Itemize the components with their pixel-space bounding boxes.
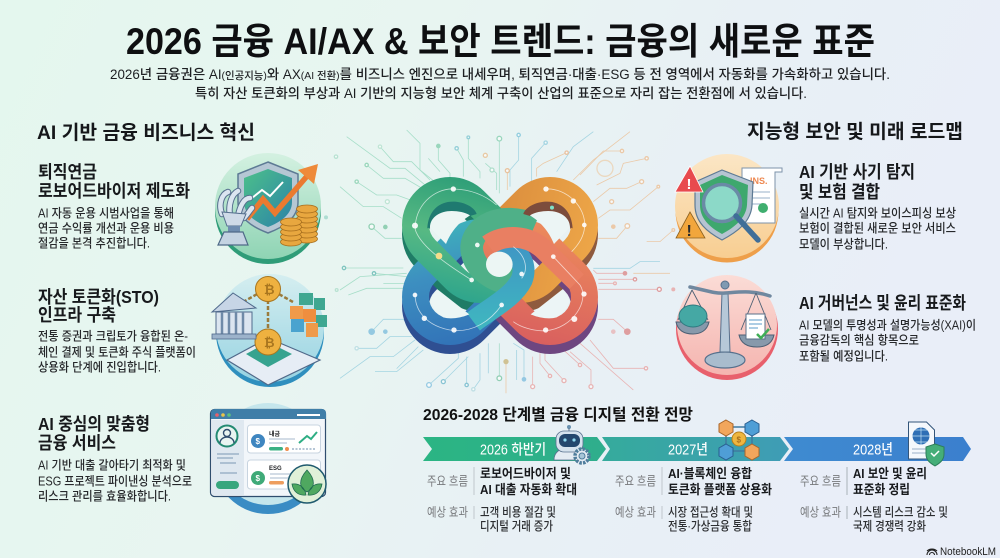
icon: finance app dashboard with leaf badge: 내금 (269, 430, 281, 438)
icon: bank, tokens and blockchain platform: ₿ (264, 335, 275, 350)
column 2027: 예상 효과 (615, 506, 656, 520)
heading: AI 중심의 맞춤형 (38, 414, 150, 434)
text block: AI 자동 운용 시범사업을 통해 (38, 206, 174, 220)
text block: 포함될 예정입니다. (799, 348, 888, 364)
text block: 상용화 단계에 진입합니다. (38, 360, 161, 374)
panel: fraud detection (675, 154, 956, 262)
heading (38, 287, 159, 325)
icon: shield, magnifier, warnings and insurance document (675, 154, 782, 262)
text block: 금융감독의 핵심 항목으로 (799, 332, 919, 348)
panel: digital transformation timeline (423, 406, 971, 534)
icon: global document and shield (908, 422, 944, 466)
text block (38, 328, 196, 374)
icon: shield, magnifier, warnings and insurance document: ! (686, 223, 692, 240)
arrow: 2027 (602, 437, 789, 461)
blue link (401, 218, 529, 346)
text block: 체인 결제 및 토큰화 주식 플랫폼이 (38, 346, 196, 360)
heading: 및 보험 결합 (799, 182, 880, 202)
heading: 퇴직연금 (38, 162, 97, 182)
text block: 보험이 결합된 새로운 보안 서비스 (799, 220, 956, 236)
icon: bank, tokens and blockchain platform (212, 274, 327, 387)
icon: bank, tokens and blockchain platform: ₿ (264, 282, 275, 297)
icon: blockchain cubes and coin (719, 420, 759, 460)
icon: robot with gear (554, 425, 589, 463)
heading: 자산 토큰화(STO) (38, 287, 159, 307)
column 2028: 시스템 리스크 감소 및 (853, 506, 948, 520)
heading: 로보어드바이저 제도화 (38, 181, 190, 201)
heading (799, 162, 915, 202)
icon: shield, magnifier, warnings and insurance document: ! (686, 176, 692, 193)
heading: 인프라 구축 (38, 305, 116, 325)
column 2026: 고객 비용 절감 및 (480, 506, 556, 520)
text block: 절감을 본격 추진합니다. (38, 236, 150, 250)
column 2027: 전통·가상금융 통합 (668, 518, 752, 534)
column 2026: 예상 효과 (427, 506, 468, 520)
icon: finance app dashboard with leaf badge: $ (256, 474, 260, 483)
column 2028: 표준화 정립 (853, 482, 910, 497)
heading (38, 162, 190, 201)
column 2027 (615, 466, 772, 534)
arrow: 2026 second half: 2026 하반기 (480, 442, 546, 458)
column 2027: 토큰화 플랫폼 상용화 (668, 482, 772, 497)
arrow: 2028: 2028년 (853, 442, 893, 458)
text block (799, 206, 956, 252)
icon: balance scale with brain and document (676, 275, 778, 380)
text block: 모델이 부상합니다. (799, 236, 888, 252)
column 2028: 예상 효과 (800, 506, 841, 520)
text block: 실시간 AI 탐지와 보이스피싱 보상 (799, 206, 956, 220)
right section heading: 지능형 보안 및 미래 로드맵 (747, 121, 963, 143)
heading (38, 414, 150, 453)
panel: asset tokenization (38, 274, 327, 387)
green link (401, 176, 529, 304)
column 2026: 디지털 거래 증가 (480, 520, 553, 534)
text block (799, 318, 976, 364)
icon: finance app dashboard with leaf badge: ESG (269, 466, 282, 472)
text block: AI 모델의 투명성과 설명가능성(XAI)이 (799, 318, 976, 332)
icon: shield, magnifier, warnings and insurance document: INS. (750, 176, 768, 186)
arrow: 2028 (784, 437, 971, 461)
intro text (110, 67, 890, 101)
column 2028: 주요 흐름 (800, 474, 841, 488)
icon: blockchain cubes and coin: $ (736, 436, 742, 444)
extrusion shadows (401, 185, 599, 355)
heading: 금융 서비스 (38, 433, 116, 453)
icon: robot hand, shield, rising arrow and coins (215, 153, 321, 264)
text block: AI 기반 대출 갈아타기 최적화 및 (38, 458, 186, 472)
column 2027: 주요 흐름 (615, 474, 656, 488)
heading: AI 기반 사기 탐지 (799, 162, 915, 182)
left section heading: AI 기반 금융 비즈니스 혁신 (37, 122, 255, 144)
text block: ESG 프로젝트 파이낸싱 분석으로 (38, 474, 192, 488)
column 2026 (427, 466, 577, 534)
central interlocking knot logo (401, 176, 599, 355)
title: 2026 금융 AI/AX & 보안 트렌드: 금융의 새로운 표준 (126, 21, 875, 62)
timeline heading: 2026-2028 단계별 금융 디지털 전환 전망 (423, 406, 693, 424)
intro text: 2026년 금융권은 AI(인공지능)와 AX(AI 전환)를 비즈니스 엔진으로 내세우며, 퇴직연금·대출·ESG 등 전 영역에서 자동화를 가속화하고 있습니다. (110, 67, 890, 82)
text block: 전통 증권과 크립토가 융합된 온- (38, 328, 188, 344)
column 2026: AI 대출 자동화 확대 (480, 482, 577, 497)
column 2028 (800, 466, 948, 534)
column 2026: 주요 흐름 (427, 474, 468, 488)
column 2027: AI·블록체인 융합 (668, 466, 752, 481)
icon: finance app dashboard with leaf badge (210, 403, 326, 514)
orange link (471, 176, 599, 304)
text block: 연금 수익률 개선과 운용 비용 (38, 222, 174, 236)
column 2026: 로보어드바이저 및 (480, 466, 571, 481)
heading: AI 거버넌스 및 윤리 표준화 (799, 293, 966, 313)
column 2027: 시장 접근성 확대 및 (668, 506, 753, 520)
text block (38, 206, 174, 250)
arrow: 2027: 2027년 (668, 442, 708, 458)
red link (471, 218, 599, 346)
panel: AI governance (676, 275, 976, 380)
text block: 리스크 관리를 효율화합니다. (38, 488, 171, 504)
text block (38, 458, 192, 504)
arrow: 2026 second half (423, 437, 606, 461)
panel: personalized services (38, 403, 326, 514)
circuit lines radiating from the centre (325, 130, 675, 393)
panel: robo-advisor (38, 153, 321, 264)
knot centre weave, openings and highlights (412, 186, 587, 333)
icon: finance app dashboard with leaf badge: $ (256, 437, 260, 446)
column 2028: AI 보안 및 윤리 (853, 466, 927, 481)
column 2028: 국제 경쟁력 강화 (853, 520, 926, 534)
intro text: 특히 자산 토큰화의 부상과 AI 기반의 지능형 보안 체계 구축이 산업의 표준으로 자리 잡는 전환점에 서 있습니다. (195, 86, 807, 101)
